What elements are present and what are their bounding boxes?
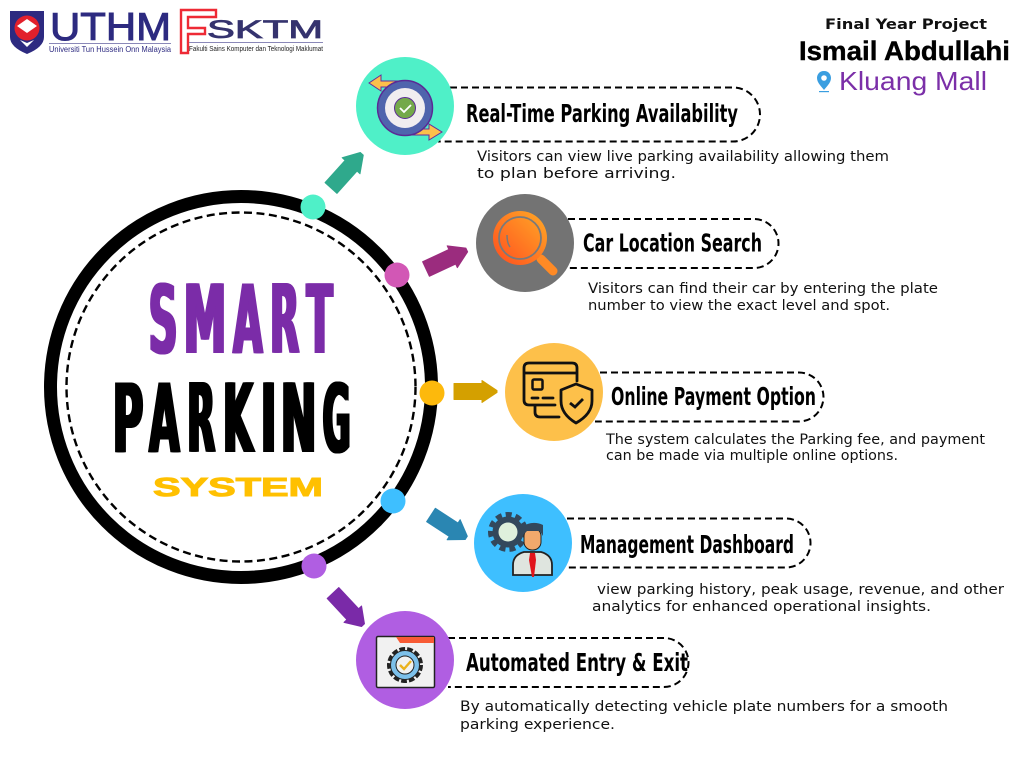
panel: online payment option [505, 343, 986, 464]
label pill [568, 219, 778, 268]
title: G [323, 364, 351, 475]
project credit: Ismail Abdullahi [799, 36, 1010, 66]
title: S [149, 266, 178, 376]
description [592, 582, 1004, 615]
title [113, 266, 351, 502]
logo: UTHM: Universiti Tun Hussein Onn Malaysia [49, 45, 172, 54]
description [477, 149, 889, 182]
panel: real-time parking availability [356, 57, 889, 182]
arrow: purple [324, 585, 372, 633]
arrow: blue [424, 505, 473, 548]
logo: UTHM [10, 6, 172, 54]
logo: FSKTM: Fakulti Sains Komputer dan Teknologi Maklumat [189, 46, 323, 53]
description: Visitors can view live parking availability allowing them [477, 149, 889, 165]
ring node: yellow [420, 380, 444, 406]
heading: Online Payment Option [611, 382, 816, 411]
description [588, 281, 938, 314]
title: SYSTEM [153, 472, 323, 502]
arrow: teal [322, 146, 371, 196]
project credit: Final Year Project [825, 17, 987, 33]
logo: FSKTM [181, 10, 323, 53]
label pill [566, 518, 810, 568]
icon: location pin [817, 71, 831, 92]
ring node: teal [300, 194, 326, 220]
icon: manager with gear [474, 494, 572, 592]
description: analytics for enhanced operational insights. [592, 599, 931, 615]
description: By automatically detecting vehicle plate numbers for a smooth [460, 699, 948, 715]
ring node: purple [302, 554, 326, 578]
label pill [438, 88, 760, 142]
project credit: Kluang Mall [839, 66, 987, 96]
heading: Real-Time Parking Availability [466, 99, 738, 128]
description [460, 699, 948, 733]
description: can be made via multiple online options. [606, 448, 898, 464]
icon: clock with arrows [356, 57, 454, 155]
label pill [595, 372, 823, 422]
title: T [307, 266, 333, 377]
description: to plan before arriving. [477, 166, 676, 182]
icon: browser window with gear [356, 611, 454, 709]
panel: management dashboard [474, 494, 1004, 615]
title: I [261, 365, 277, 475]
arrow: magenta [421, 239, 472, 280]
label pill [448, 638, 688, 687]
project credit [799, 17, 1010, 96]
heading: Car Location Search [583, 228, 762, 258]
description: Visitors can find their car by entering the plate [588, 281, 938, 297]
heading: Automated Entry & Exit [466, 648, 688, 677]
title: A [150, 366, 180, 476]
description [605, 432, 986, 464]
title: P [113, 365, 144, 475]
description: parking experience. [460, 717, 615, 733]
panel: automated entry and exit [356, 611, 948, 733]
main ring [50, 196, 432, 578]
title: R [271, 266, 300, 377]
heading: Management Dashboard [580, 530, 794, 559]
title: N [281, 366, 317, 475]
title: R [188, 363, 216, 474]
icon: card and shield [505, 343, 603, 441]
logo: FSKTM: SKTM [207, 16, 323, 44]
icon: magnifying glass [476, 194, 574, 292]
logo: UTHM: UTHM [50, 6, 171, 49]
title: A [234, 266, 263, 377]
description: number to view the exact level and spot. [588, 298, 890, 314]
ring node: magenta [384, 262, 410, 288]
ring node: blue [380, 488, 406, 514]
arrow: gold [454, 380, 497, 402]
panel: car location search [476, 194, 938, 314]
description: view parking history, peak usage, revenue, and other [597, 582, 1004, 598]
description: The system calculates the Parking fee, and payment [605, 432, 986, 448]
title: M [184, 267, 227, 376]
title: K [224, 366, 255, 476]
